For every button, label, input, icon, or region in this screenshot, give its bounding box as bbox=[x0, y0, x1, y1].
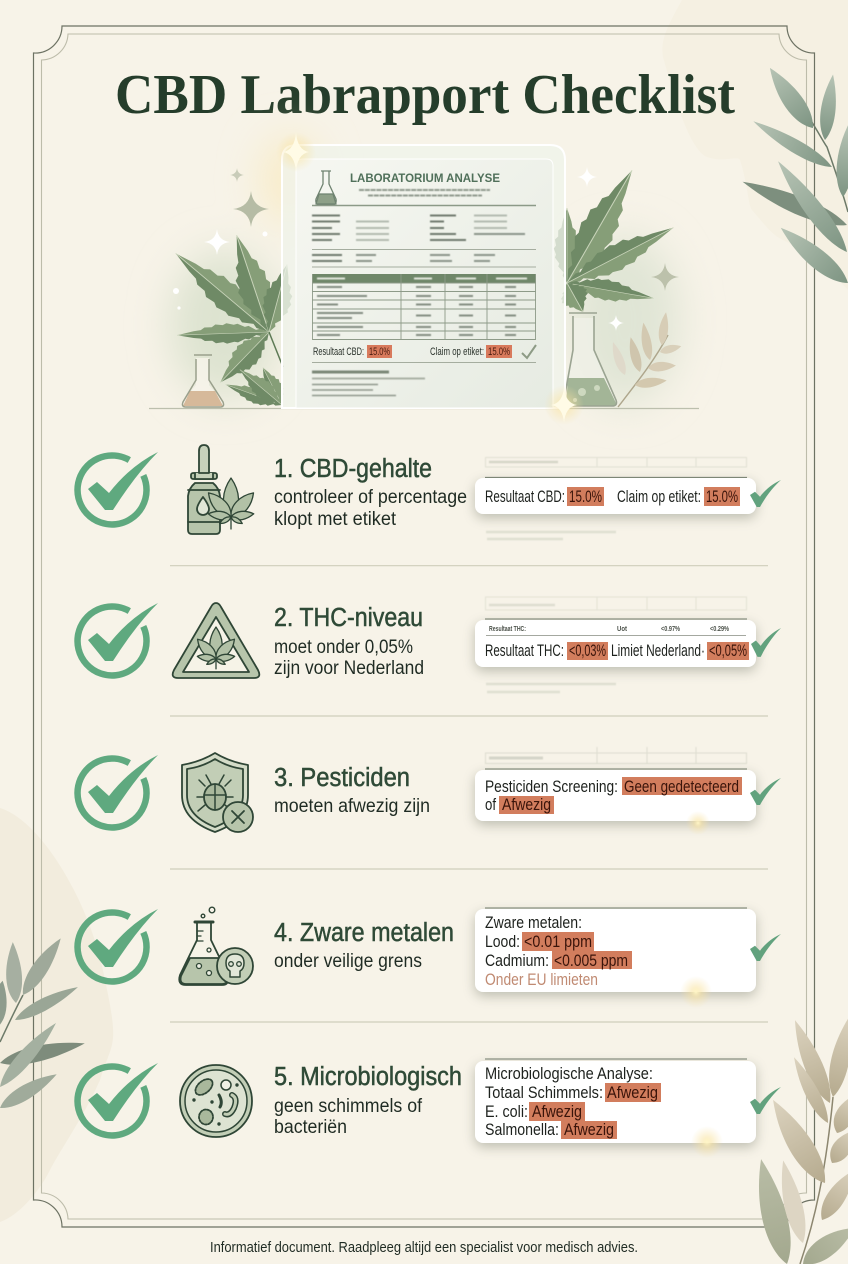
glass tablet with lab report bbox=[282, 145, 565, 408]
text: THC-niveau: moet onder 0,05% bbox=[274, 637, 413, 658]
lab card 3: Afwezig bbox=[502, 796, 551, 814]
lab card 5: Totaal Schimmels: bbox=[485, 1084, 603, 1102]
text: Zware metalen: 4. Zware metalen bbox=[274, 919, 454, 947]
dried plant right bbox=[609, 312, 682, 407]
lab card 2: Uot bbox=[617, 626, 628, 633]
text: THC-niveau: 2. THC-niveau bbox=[274, 604, 423, 632]
lab card 2: Resultaat THC: bbox=[485, 642, 564, 660]
lab card 1: Resultaat CBD: bbox=[485, 488, 565, 506]
icon: warning triangle with leaf bbox=[173, 603, 259, 678]
botanical: bottom left green branch bbox=[0, 934, 86, 1114]
icon: petri dish with microbes bbox=[180, 1065, 252, 1137]
ground line bbox=[149, 408, 699, 410]
cannabis leaf right bbox=[551, 161, 680, 319]
report fields bbox=[312, 216, 525, 261]
lab card 3: Pesticiden Screening: bbox=[485, 778, 618, 796]
row 1: CBD-gehalte bbox=[78, 445, 781, 539]
flask left bbox=[182, 355, 224, 407]
text: CBD-gehalte: 1. CBD-gehalte bbox=[274, 455, 432, 483]
text: Zware metalen: onder veilige grens bbox=[274, 951, 422, 972]
watercolor stain: bottom left bbox=[0, 808, 113, 1222]
report flask icon bbox=[316, 171, 336, 205]
cannabis leaf left bbox=[166, 230, 301, 392]
lab card 1: 15.0% bbox=[706, 488, 738, 506]
report footer lines bbox=[312, 372, 425, 396]
report result row: Claim op etiket: bbox=[430, 346, 484, 358]
small cannabis leaf bottom bbox=[223, 362, 291, 413]
lab card 4 bbox=[475, 900, 781, 1008]
text: CBD-gehalte: klopt met etiket bbox=[274, 509, 397, 530]
text: THC-niveau: zijn voor Nederland bbox=[274, 658, 424, 679]
lab card 2 bbox=[475, 597, 781, 692]
report result row bbox=[313, 345, 536, 358]
hero backdrop washes bbox=[170, 135, 680, 405]
botanical: bottom right beige branch bbox=[748, 1013, 848, 1264]
row 5: Microbiologisch bbox=[78, 1051, 781, 1158]
text: Zware metalen bbox=[274, 919, 454, 972]
check badge 4 bbox=[78, 909, 158, 981]
lab card 4: Lood: bbox=[485, 933, 520, 951]
flask right bbox=[562, 313, 616, 406]
lab card 5 bbox=[475, 1051, 781, 1158]
text: Pesticiden: moeten afwezig zijn bbox=[274, 796, 430, 817]
check badge 3 bbox=[78, 755, 158, 827]
lab card 2: <0,05% bbox=[709, 642, 747, 660]
report result row: Resultaat CBD: bbox=[313, 346, 364, 358]
icon: shield with bug bbox=[182, 753, 253, 832]
lab card 1 bbox=[475, 458, 781, 539]
lab card 3 bbox=[475, 747, 781, 838]
text: CBD-gehalte bbox=[274, 455, 467, 530]
watercolor stain: top right bbox=[662, 0, 848, 290]
row 3: Pesticiden bbox=[78, 747, 781, 838]
check badge 5 bbox=[78, 1063, 158, 1135]
text: Microbiologisch: geen schimmels of bbox=[274, 1096, 423, 1117]
lab card 3: of bbox=[485, 796, 496, 814]
check badge 2 bbox=[78, 603, 158, 675]
lab card 2: <0.29% bbox=[710, 626, 730, 633]
lab card 5: Afwezig bbox=[607, 1084, 658, 1102]
text: Pesticiden bbox=[274, 764, 430, 817]
text: Pesticiden: 3. Pesticiden bbox=[274, 764, 410, 792]
text: Microbiologisch: bacteriën bbox=[274, 1117, 347, 1138]
lab card 5: Afwezig bbox=[532, 1103, 582, 1121]
sparkles bbox=[173, 167, 679, 331]
hero illustration bbox=[149, 132, 699, 425]
lab card 2: Limiet Nederland· bbox=[611, 642, 705, 660]
lab card 4: Onder EU limieten bbox=[485, 971, 598, 989]
text: Microbiologisch bbox=[274, 1063, 462, 1138]
lab card 4: Cadmium: bbox=[485, 952, 549, 970]
title: CBD Labrapport Checklist bbox=[115, 64, 735, 126]
row 4: Zware metalen bbox=[78, 900, 781, 1008]
glow highlights bbox=[276, 132, 584, 425]
footer disclaimer: Informatief document. Raadpleeg altijd een specialist voor medisch advies. bbox=[210, 1239, 638, 1256]
check badge 1 bbox=[78, 452, 158, 524]
lab card 4: <0.005 ppm bbox=[554, 952, 628, 970]
botanical: top right green branch bbox=[739, 63, 848, 291]
lab card 4: Zware metalen: bbox=[485, 914, 582, 932]
dividers bbox=[170, 566, 768, 1022]
icon: dropper bottle with leaf bbox=[188, 445, 258, 534]
lab card 5: Afwezig bbox=[564, 1121, 614, 1139]
lab card 5: E. coli: bbox=[485, 1103, 528, 1121]
report subtitle bars bbox=[359, 190, 490, 196]
lab card 3: Geen gedetecteerd bbox=[624, 778, 739, 796]
row 2: THC-niveau bbox=[78, 597, 781, 692]
lab card 1: 15.0% bbox=[569, 488, 602, 506]
text: Microbiologisch: 5. Microbiologisch bbox=[274, 1063, 462, 1091]
report heading: LABORATORIUM ANALYSE bbox=[350, 171, 500, 185]
lab card 2: <0,03% bbox=[569, 642, 606, 660]
report result row: 15.0% bbox=[369, 346, 390, 358]
text: THC-niveau bbox=[274, 604, 424, 679]
lab card 4: <0.01 ppm bbox=[524, 933, 592, 951]
icon: flask with skull bbox=[179, 907, 253, 985]
lab card 2: <0.97% bbox=[661, 626, 681, 633]
report table bbox=[312, 274, 536, 340]
lab card 1: Claim op etiket: bbox=[617, 488, 701, 506]
text: CBD-gehalte: controleer of percentage bbox=[274, 487, 467, 508]
report result row: 15.0% bbox=[488, 346, 510, 358]
lab card 2: Resultaat THC: bbox=[489, 626, 526, 633]
lab card 5: Microbiologische Analyse: bbox=[485, 1065, 653, 1083]
lab card 5: Salmonella: bbox=[485, 1121, 559, 1139]
